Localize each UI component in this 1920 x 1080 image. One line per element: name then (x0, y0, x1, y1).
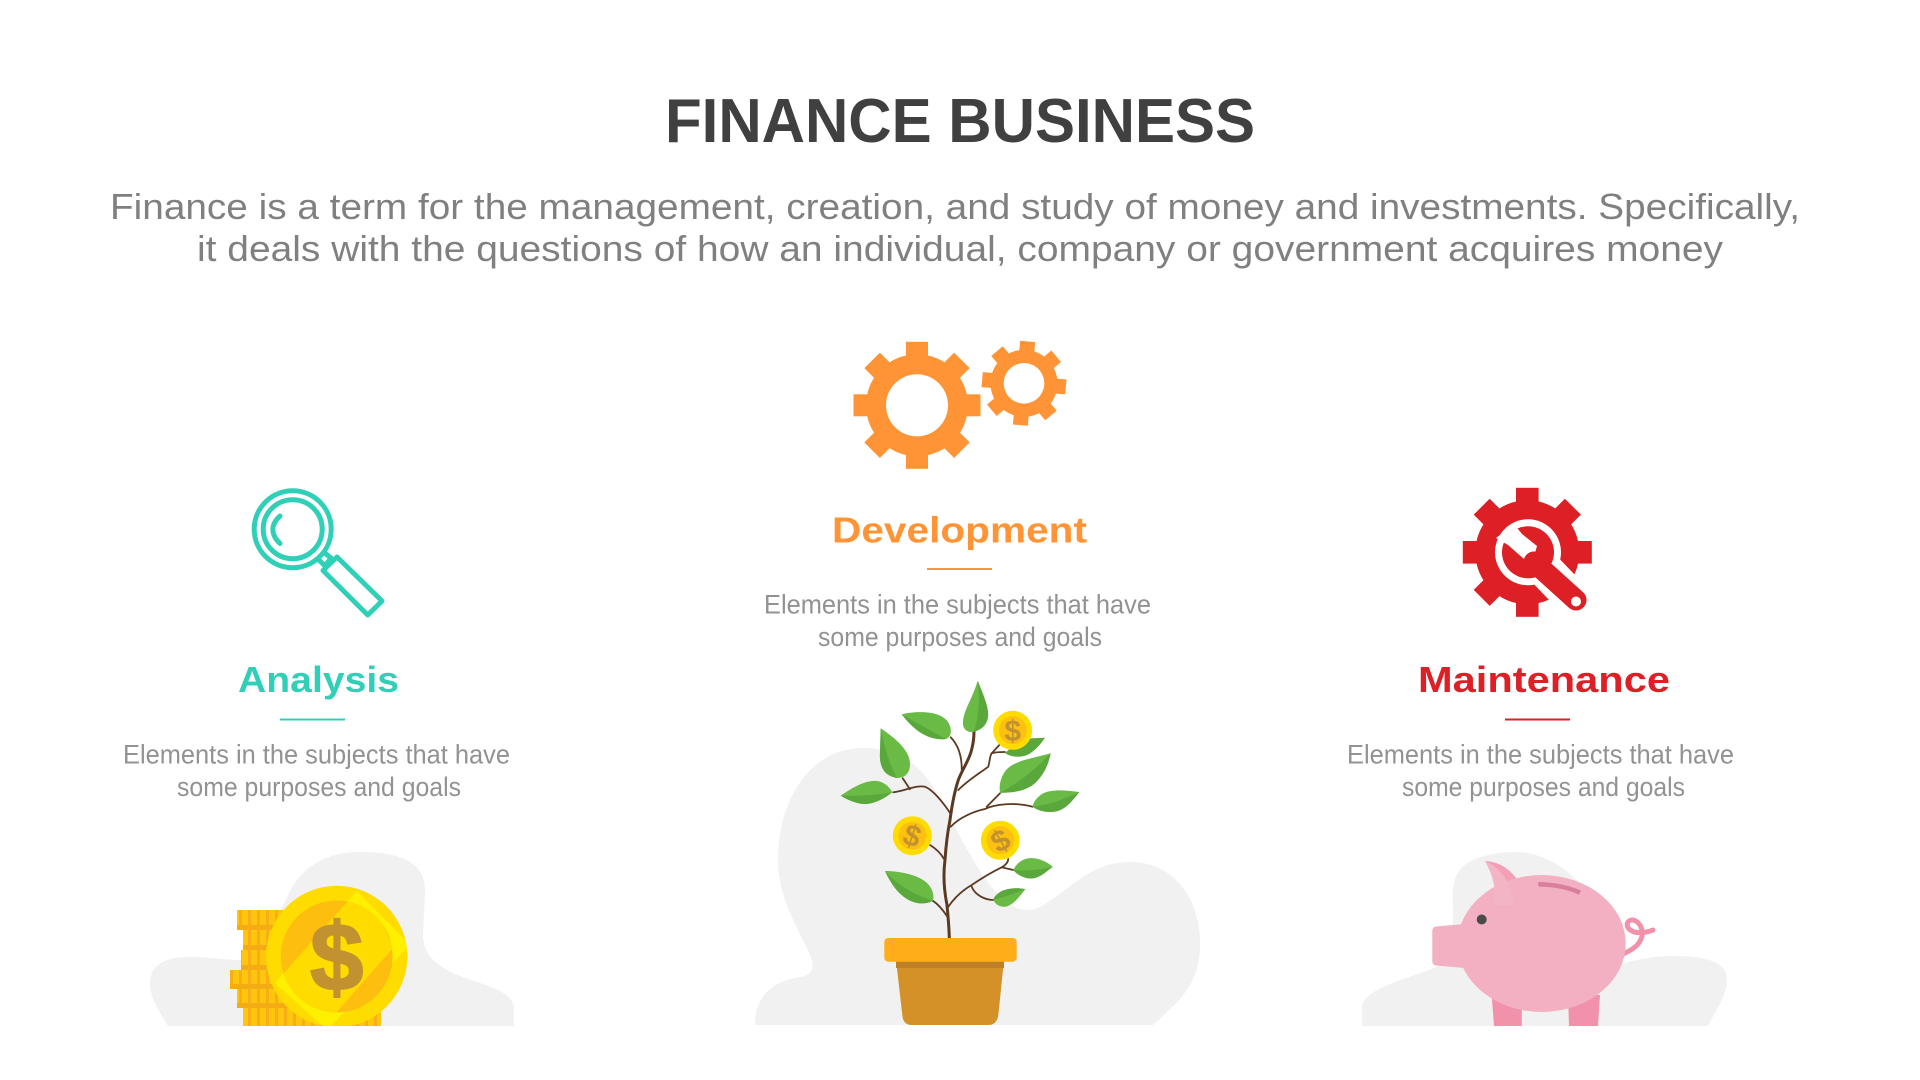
illustration: flower pot (884, 938, 1017, 1025)
intro paragraph (110, 186, 1800, 269)
panel: maintenance (1347, 488, 1734, 1026)
intro paragraph: it deals with the questions of how an individual, company or government acquires money (197, 228, 1723, 269)
background blob: maintenance (1362, 852, 1727, 1026)
divider: analysis (280, 718, 345, 720)
illustration: piggy bank (1432, 861, 1653, 1026)
illustration: plant stems (893, 732, 1033, 938)
panel: analysis (123, 491, 514, 1030)
divider: development (927, 568, 992, 570)
illustration: small coins on plant: $ (899, 818, 925, 855)
panel: development (755, 338, 1200, 1025)
text: maintenance description (1347, 740, 1734, 802)
text: maintenance description: Elements in the subjects that have (1347, 740, 1734, 770)
background blob: analysis (150, 852, 514, 1026)
heading: Development: Development (832, 510, 1087, 550)
icon: gears (854, 338, 1070, 469)
divider: maintenance (1505, 718, 1570, 720)
background blob: development (755, 748, 1200, 1025)
illustration: large dollar coin: $ (310, 904, 363, 1011)
heading: Maintenance: Maintenance (1418, 659, 1670, 700)
text: development description (764, 590, 1151, 652)
infographic canvas (113, 98, 1796, 1026)
text: maintenance description: some purposes and goals (1402, 772, 1685, 802)
text: analysis description: some purposes and goals (177, 772, 461, 802)
illustration: small coins on plant: $ (985, 823, 1017, 860)
text: analysis description (123, 740, 510, 802)
title: FINANCE BUSINESS (665, 87, 1255, 156)
heading: Analysis: Analysis (238, 659, 399, 700)
illustration: leaves (841, 681, 1079, 907)
icon: gear with wrench (1463, 488, 1592, 617)
illustration: small coins on plant (893, 711, 1032, 860)
illustration: small coins on plant: $ (1004, 715, 1021, 748)
text: development description: some purposes and goals (818, 622, 1102, 652)
text: development description: Elements in the subjects that have (764, 590, 1151, 620)
intro paragraph: Finance is a term for the management, creation, and study of money and investments. Specifically, (110, 186, 1800, 227)
icon: magnifying glass (254, 491, 382, 615)
illustration: coin stack (230, 910, 381, 1026)
text: analysis description: Elements in the subjects that have (123, 740, 510, 770)
illustration: large dollar coin (266, 886, 410, 1030)
